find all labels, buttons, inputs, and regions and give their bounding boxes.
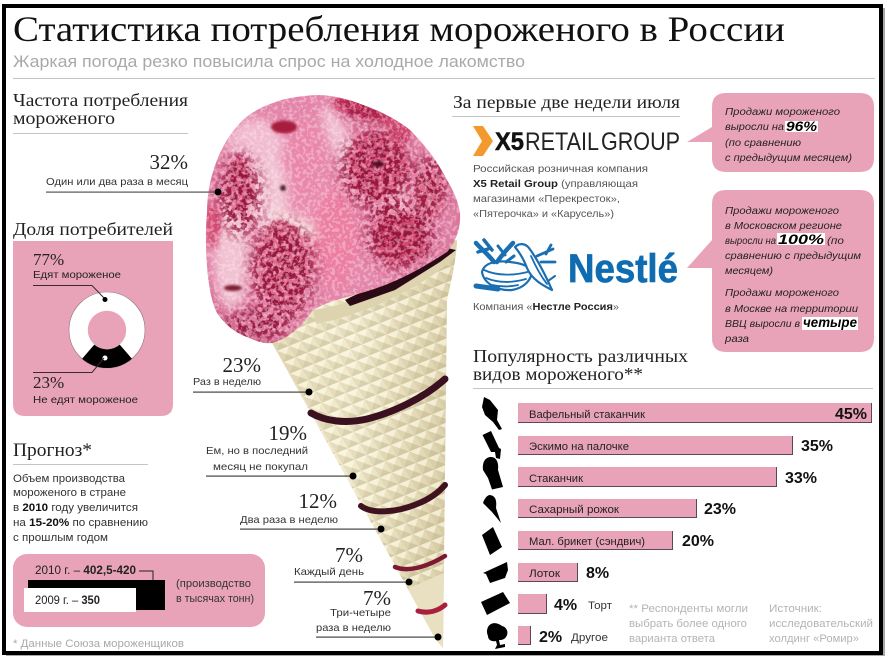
icons: ice cream types xyxy=(481,397,510,649)
label: 19% xyxy=(206,421,356,480)
bar: tray xyxy=(518,563,609,582)
callout: X5 sales: (по сравнению xyxy=(725,137,801,149)
icon: sugar cone xyxy=(483,495,501,523)
logo: Nestle xyxy=(476,240,678,291)
bar: eskimo: Эскимо на палочке xyxy=(529,441,629,453)
bar: other xyxy=(518,626,608,646)
heading: popularity xyxy=(473,346,688,384)
footnote: respondents: варианта ответа xyxy=(629,633,716,645)
bar: cake: 4% xyxy=(554,597,577,614)
icon: nest with birds xyxy=(476,240,555,290)
callout: Nestle sales: ВВЦ выросли в xyxy=(725,318,801,330)
panel: production: 2010 г. – 402,5-420 xyxy=(35,565,136,577)
bar: cup xyxy=(518,467,817,487)
label: 7% daily xyxy=(294,543,412,586)
label: 19%: 19% xyxy=(268,421,307,445)
label: 12% xyxy=(240,489,384,532)
icon: eskimo xyxy=(482,431,501,459)
heading: consumers share: Доля потребителей xyxy=(13,219,173,239)
bar: tray: 8% xyxy=(586,565,609,582)
icon: cake xyxy=(481,592,510,615)
callout: Nestle sales: месяцем) xyxy=(725,265,773,277)
bar: small sandwich: Мал. брикет (сэндвич) xyxy=(529,536,645,548)
bar: sugar cone xyxy=(518,499,736,518)
bar: tray: Лоток xyxy=(529,568,560,580)
label: 12%: 12% xyxy=(298,489,337,513)
cone body xyxy=(262,240,462,650)
callout: Nestle sales: в Московском регионе xyxy=(725,220,842,232)
title: Статистика потребления мороженого в России xyxy=(13,9,785,49)
footnote: respondents: выбрать более одного xyxy=(629,618,747,630)
bar: sugar cone: Сахарный рожок xyxy=(529,504,619,516)
callout: Nestle sales: Продажи мороженого xyxy=(725,205,839,217)
text: X5 description: «Пятерочка» и «Карусель») xyxy=(473,208,614,220)
callout: X5 sales xyxy=(687,93,874,172)
footnote: union: * Данные Союза мороженщиков xyxy=(13,638,184,650)
label: 23%: 23% xyxy=(222,353,261,377)
label: 7% three-four xyxy=(316,586,442,640)
logo: X5 Retail Group xyxy=(473,126,680,156)
logo: X5 Retail Group: X5 xyxy=(495,128,524,156)
heading: popularity: Популярность различных xyxy=(473,346,688,366)
bar: eskimo xyxy=(518,436,833,455)
logo: X5 Retail Group: GROUP xyxy=(601,128,680,156)
bar: other: Другое xyxy=(571,632,608,644)
callout: Nestle sales: 100% xyxy=(778,232,824,247)
panel: consumers share xyxy=(13,241,173,416)
text: X5 description: Российская розничная компания xyxy=(473,163,648,175)
source: Источник: xyxy=(769,603,822,615)
panel: consumers share: Едят мороженое xyxy=(33,269,121,281)
heading: first two weeks: За первые две недели июля xyxy=(453,92,680,112)
bar: cup: 33% xyxy=(785,470,817,487)
panel: consumers share: 77% xyxy=(33,250,64,269)
label: 19%: Ем, но в последний xyxy=(206,445,308,457)
ice cream cone xyxy=(200,90,465,650)
bar: cup: Стаканчик xyxy=(529,473,583,485)
label: 19%: месяц не покупал xyxy=(213,461,308,473)
icon: cup xyxy=(483,457,503,490)
heading: forecast: Прогноз* xyxy=(13,440,92,461)
label: 32%: 32% xyxy=(150,150,188,174)
bar: small sandwich xyxy=(518,531,714,550)
forecast text: с прошлым годом xyxy=(13,532,108,544)
callout: Nestle sales: в Москве на территории xyxy=(725,303,858,315)
heading: frequency: мороженого xyxy=(13,108,115,128)
forecast text xyxy=(13,473,148,544)
scoop xyxy=(200,90,465,350)
icon: sandwich xyxy=(482,527,502,555)
callout: Nestle sales: выросли на xyxy=(725,235,776,247)
panel: production xyxy=(13,554,265,627)
icon: waffle cup xyxy=(482,397,502,430)
panel: consumers share: 23% xyxy=(33,373,64,392)
heading: frequency: Частота потребления xyxy=(13,90,188,110)
label: 32%: Один или два раза в месяц xyxy=(46,176,188,188)
callout: Nestle sales: четыре xyxy=(803,315,857,330)
icon: tray xyxy=(483,562,508,583)
panel: production: 2009 г. – 350 xyxy=(35,595,100,607)
bar chart: popularity xyxy=(518,403,872,646)
footnote: respondents: ** Респонденты могли xyxy=(629,603,748,615)
bar: cake xyxy=(518,594,612,614)
label: 23% xyxy=(193,353,312,396)
text: Nestle description: Компания « Нестле Россия » xyxy=(473,301,619,313)
callout: X5 sales: выросли на xyxy=(725,121,784,133)
bar: sugar cone: 23% xyxy=(704,501,736,518)
forecast text: мороженого в стране xyxy=(13,487,126,499)
callout: X5 sales: Продажи мороженого xyxy=(725,106,840,118)
forecast text: в 2010 году увеличится xyxy=(13,502,138,514)
bar: other: 2% xyxy=(539,629,562,646)
source: исследовательский xyxy=(769,618,873,630)
callout: Nestle sales: (по xyxy=(827,235,844,247)
callout: Nestle sales: сравнению с предыдущим xyxy=(725,250,861,262)
panel: production: в тысячах тонн) xyxy=(176,593,254,605)
logo: Nestle: Nestlé xyxy=(568,247,678,291)
cone bands xyxy=(311,379,445,612)
callout: Nestle sales xyxy=(687,190,874,352)
label: 12%: Два раза в неделю xyxy=(240,514,338,526)
heading: frequency xyxy=(13,90,188,128)
text: X5 description xyxy=(473,163,648,220)
callout: X5 sales: 96% xyxy=(786,119,817,134)
source xyxy=(769,603,873,645)
callout: Nestle sales: раза xyxy=(724,333,749,345)
panel: production: (производство xyxy=(176,578,251,590)
donut chart xyxy=(69,292,145,368)
footnote: respondents xyxy=(629,603,748,645)
text: X5 description: магазинами «Перекресток», xyxy=(473,193,620,205)
callout: Nestle sales: Продажи мороженого xyxy=(725,287,839,299)
label: 23%: Раз в неделю xyxy=(193,376,261,388)
label: 32% xyxy=(46,150,222,196)
forecast text: Объем производства xyxy=(13,473,126,485)
bar: cake: Торт xyxy=(588,600,612,612)
forecast text: на 15-20% по сравнению xyxy=(13,517,148,529)
bar: eskimo: 35% xyxy=(801,438,833,455)
subtitle: Жаркая погода резко повысила спрос на холодное лакомство xyxy=(13,52,525,71)
panel: consumers share: Не едят мороженое xyxy=(33,394,138,406)
bar: waffle cup: Вафельный стаканчик xyxy=(529,409,645,421)
callout: X5 sales: с предыдущим месяцем) xyxy=(725,152,852,164)
label: 7% three-four: раза в неделю xyxy=(316,622,391,634)
bar: small sandwich: 20% xyxy=(682,533,714,550)
bar: waffle cup: 45% xyxy=(835,406,867,423)
label: 7% three-four: Три-четыре xyxy=(330,607,391,619)
bar: waffle cup xyxy=(518,403,872,423)
heading: popularity: видов мороженого** xyxy=(473,364,643,384)
text: X5 description: X5 Retail Group (управляющая xyxy=(473,178,638,190)
icon: other xyxy=(487,623,507,649)
label: 7% daily: 7% xyxy=(335,543,363,567)
logo: X5 Retail Group: RETAIL xyxy=(525,128,599,156)
source: холдинг «Ромир» xyxy=(769,633,859,645)
label: 7% three-four: 7% xyxy=(363,586,391,610)
label: 7% daily: Каждый день xyxy=(294,566,365,578)
